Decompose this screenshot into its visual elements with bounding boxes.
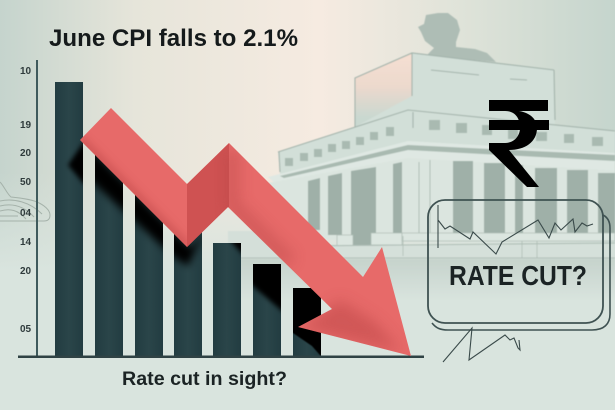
callout text: RATE CUT? — [449, 260, 587, 291]
axis labels: 05 — [20, 324, 32, 335]
axis labels: 14 — [20, 237, 32, 248]
background building illustration — [228, 13, 615, 301]
bars — [55, 82, 83, 357]
signature scribble — [443, 328, 520, 362]
axis labels: 10 — [20, 66, 32, 77]
bar chart — [18, 60, 424, 362]
cornice — [268, 141, 615, 183]
colonnade wall — [268, 158, 615, 240]
columns — [308, 161, 615, 245]
callout: rate cut speech box — [428, 200, 610, 362]
axis labels: 19 — [20, 120, 32, 131]
rooftop block — [355, 53, 555, 130]
axis labels — [20, 66, 32, 335]
baseline — [18, 356, 424, 358]
axis labels: 20 — [20, 266, 32, 277]
attic storey — [278, 110, 615, 174]
axis labels: 04 — [20, 208, 32, 219]
arrow shadow on bars — [68, 140, 326, 362]
chart caption: Rate cut in sight? — [122, 369, 287, 390]
statue silhouette — [418, 13, 496, 62]
attic windows — [285, 120, 603, 166]
title: June CPI falls to 2.1% — [49, 25, 298, 52]
axis labels: 50 — [20, 177, 32, 188]
squiggle trend line — [438, 205, 593, 254]
column bases and steps — [337, 233, 615, 247]
y axis — [36, 60, 38, 357]
red down arrow — [80, 108, 411, 356]
icon: rupee symbol — [489, 100, 549, 187]
axis labels: 20 — [20, 148, 32, 159]
ground band — [235, 259, 615, 301]
left dome sketch — [0, 182, 50, 221]
